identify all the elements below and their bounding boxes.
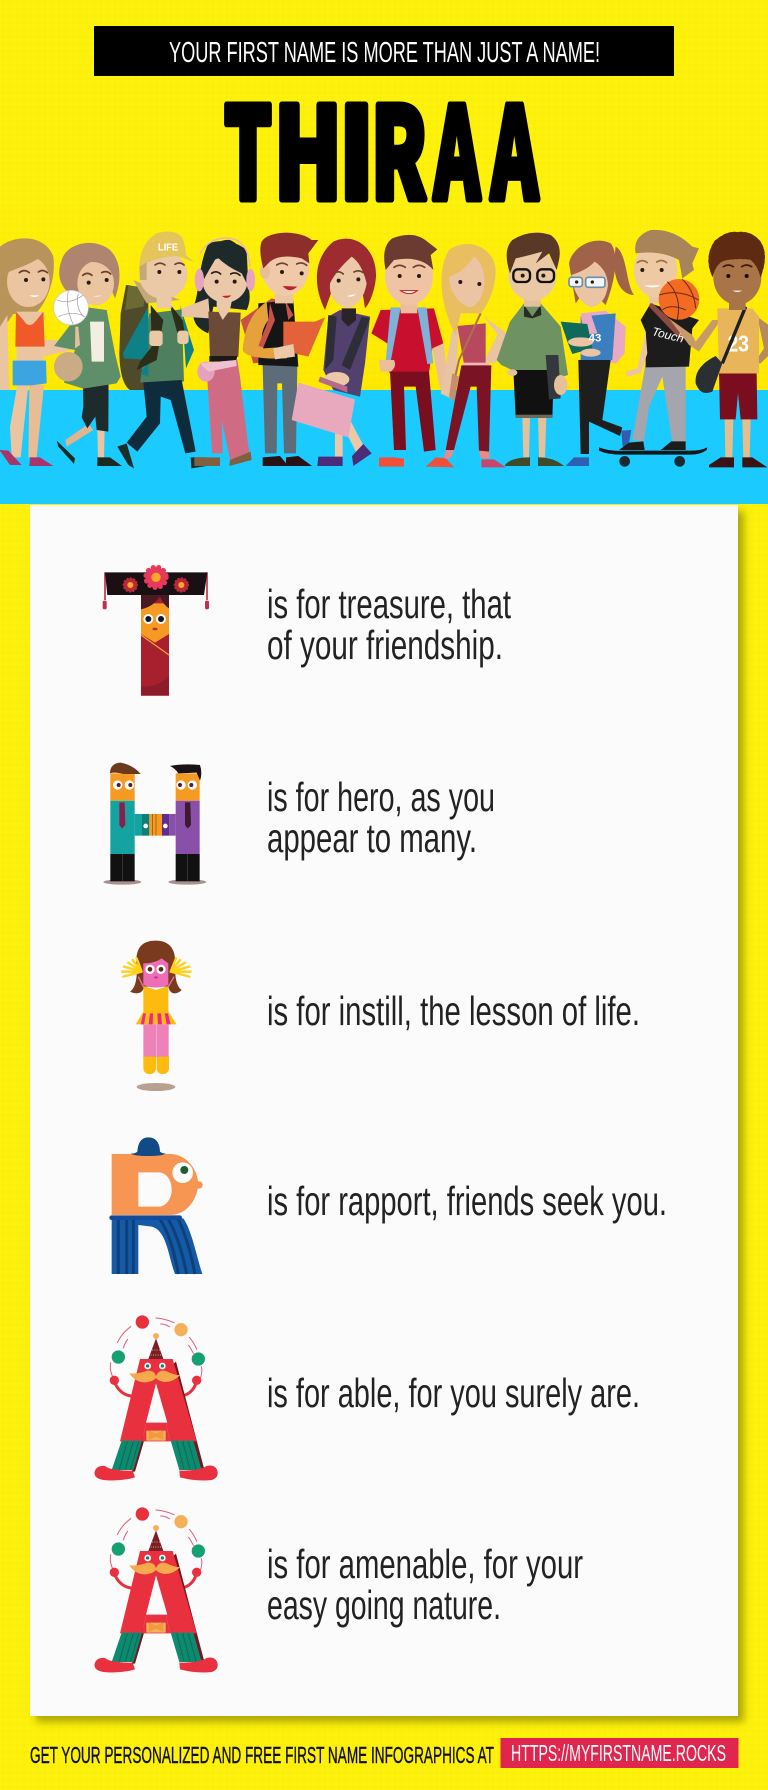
person: boy with glasses bbox=[497, 233, 568, 466]
person: red haired girl with pink bag bbox=[292, 239, 376, 466]
person: curly haired boy with satchel bbox=[696, 233, 768, 467]
title: name bbox=[224, 54, 539, 236]
icon: letter I character bbox=[122, 941, 191, 1091]
title: name: A bbox=[490, 54, 539, 236]
person: blonde girl bbox=[441, 244, 507, 467]
person: girl with ponytail and tablet: 43 bbox=[589, 333, 601, 345]
icon: second letter A character bbox=[95, 1507, 218, 1672]
text: second A line: easy going nature. bbox=[267, 1582, 501, 1628]
text: second A line bbox=[267, 1541, 583, 1628]
panel: white card bbox=[30, 505, 738, 1716]
icon: basketball bbox=[659, 279, 699, 320]
icon: letter H character bbox=[103, 763, 206, 885]
text: H line: appear to many. bbox=[267, 815, 477, 861]
person: curly haired boy with satchel: 23 bbox=[727, 331, 749, 357]
icon: letter T character bbox=[103, 567, 209, 696]
title: name: A bbox=[433, 54, 481, 236]
icon: letter R character bbox=[109, 1137, 203, 1274]
text: H line: is for hero, as you bbox=[267, 774, 495, 820]
person: boy with book bbox=[241, 233, 325, 466]
icon: letter A character bbox=[95, 1315, 218, 1480]
blue floor band bbox=[0, 390, 768, 504]
person: boy in red shirt bbox=[371, 235, 454, 467]
person: girl with ponytail and tablet bbox=[561, 241, 634, 466]
person: boy on skateboard bbox=[599, 230, 721, 467]
text: T line bbox=[267, 581, 511, 668]
person: boy with cap and backpack bbox=[117, 231, 207, 468]
title: name: T bbox=[224, 54, 272, 236]
title: name: H bbox=[274, 54, 342, 236]
illustration: group of people, left half bbox=[0, 231, 376, 468]
text: T line: of your friendship. bbox=[267, 622, 503, 668]
text: H line bbox=[267, 774, 495, 861]
title: name: I bbox=[339, 54, 374, 236]
text: second A line: is for amenable, for your bbox=[267, 1541, 583, 1587]
panel: card shadow bbox=[36, 511, 744, 1722]
person: girl with headphones bbox=[182, 238, 255, 466]
person: girl with volleyball bbox=[54, 243, 122, 466]
banner: tagline bbox=[94, 26, 674, 76]
text: T line: is for treasure, that bbox=[267, 581, 511, 627]
person: girl in orange top bbox=[0, 238, 78, 466]
title: name: R bbox=[371, 54, 427, 236]
person: boy on skateboard: Touch bbox=[651, 324, 686, 346]
person: boy with cap and backpack: LIFE bbox=[158, 243, 178, 254]
illustration: group of people, right half bbox=[371, 230, 768, 467]
